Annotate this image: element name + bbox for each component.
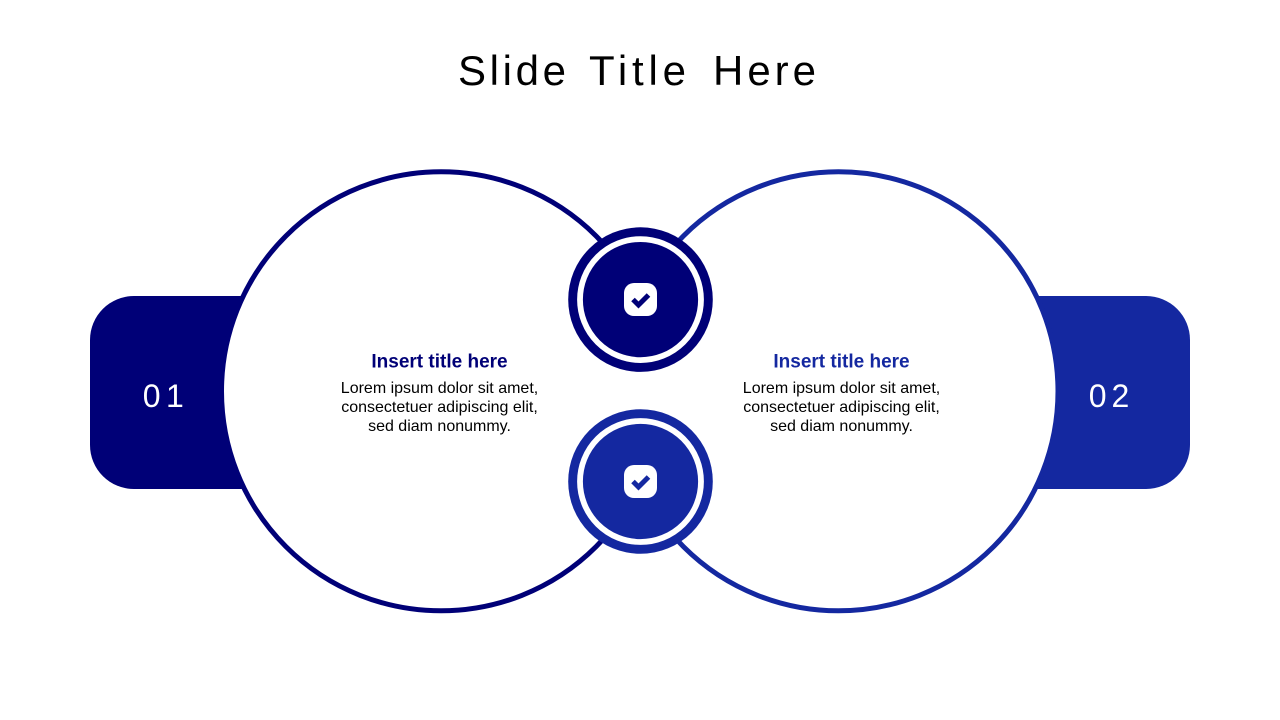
- circle panel 2: [619, 172, 1058, 611]
- title: Title: [589, 47, 686, 94]
- text block 2: Lorem ipsum dolor sit amet,: [743, 380, 940, 397]
- text block 1: sed diam nonummy.: [368, 418, 511, 435]
- text block 2: sed diam nonummy.: [770, 418, 913, 435]
- tab 01: 01: [143, 378, 189, 414]
- text block 1: Lorem ipsum dolor sit amet,: [341, 380, 538, 397]
- tab 02: 02: [1089, 378, 1134, 414]
- title: Here: [713, 47, 816, 94]
- text block 2: consectetuer adipiscing elit,: [743, 399, 940, 416]
- circle panel 1: [222, 172, 660, 611]
- text block 1: [341, 352, 538, 435]
- text block 2: Insert title here: [773, 352, 910, 372]
- tab 02: [970, 296, 1190, 489]
- title: Slide: [458, 47, 566, 94]
- badge 1: [568, 227, 713, 372]
- title: [458, 47, 816, 94]
- text block 1: consectetuer adipiscing elit,: [341, 399, 538, 416]
- overlap cover: [600, 243, 680, 540]
- tab 01: [90, 296, 310, 489]
- text block 1: Insert title here: [371, 352, 508, 372]
- text block 2: [743, 352, 940, 435]
- badge 2: [568, 409, 713, 554]
